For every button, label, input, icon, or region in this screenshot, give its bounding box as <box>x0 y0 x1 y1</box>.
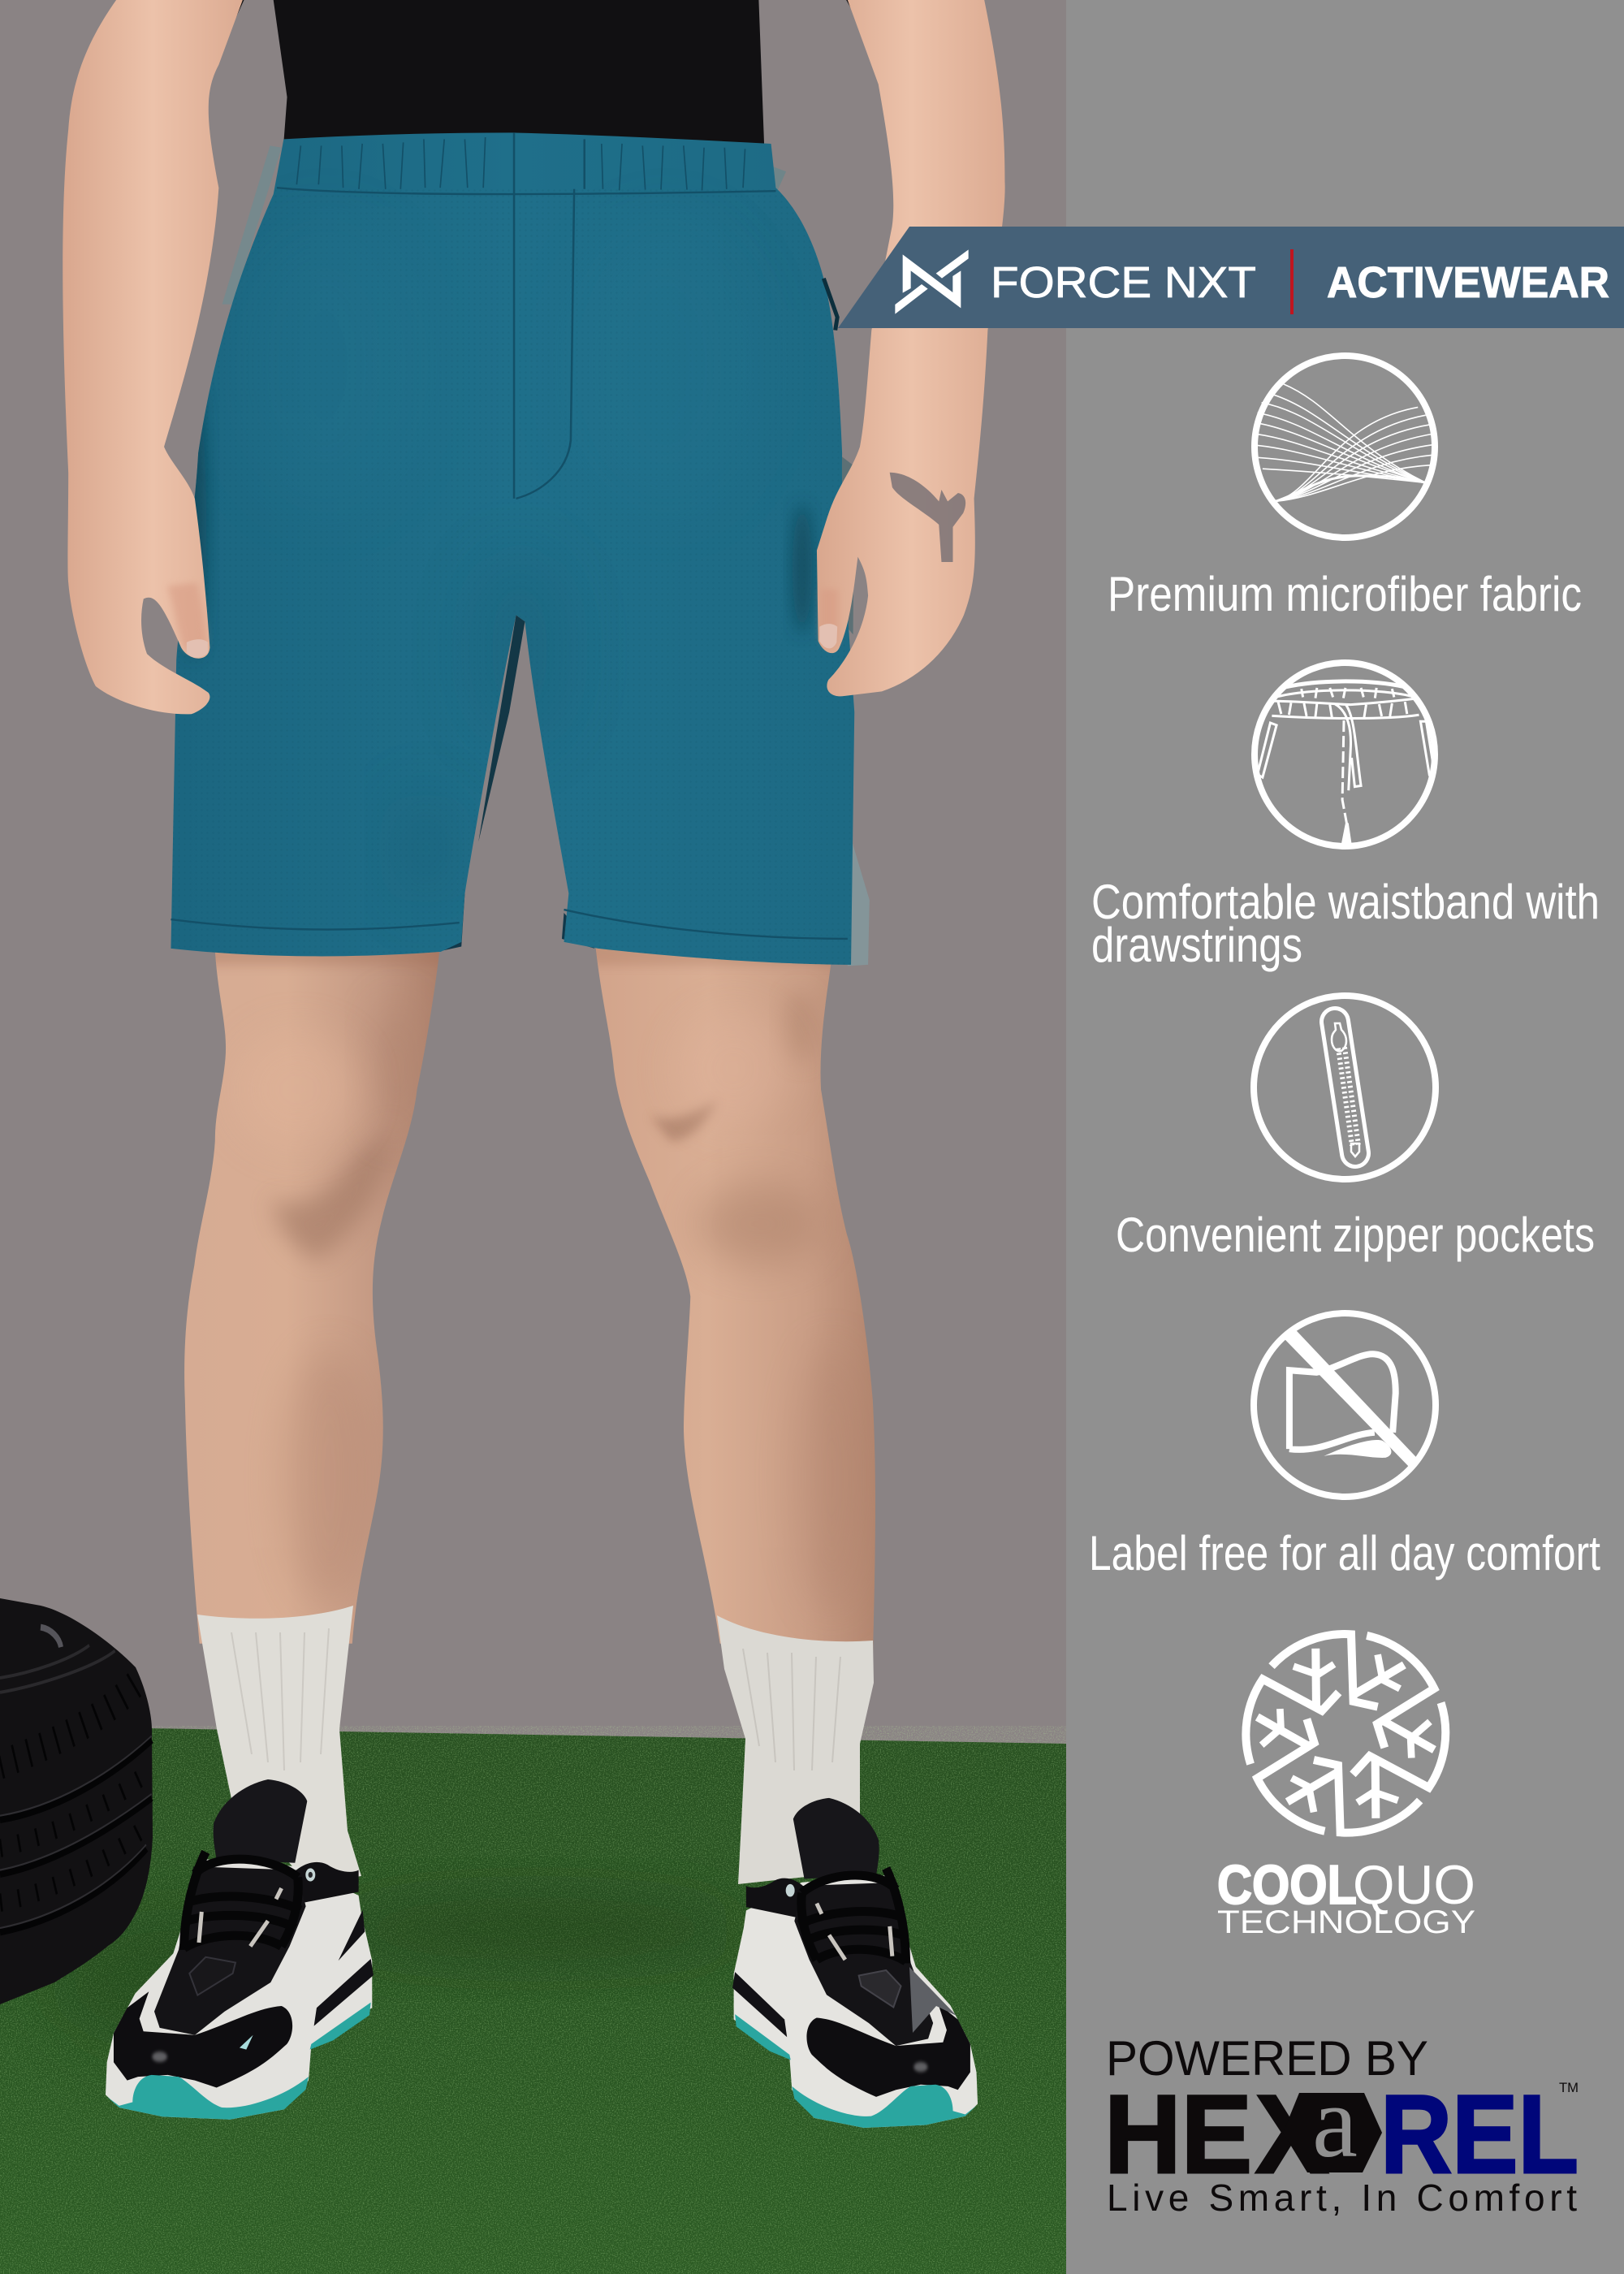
tongue <box>214 1779 307 1863</box>
feature: microfiber fabric <box>1108 356 1582 621</box>
Coolquo wordmark <box>1217 1854 1475 1940</box>
laces <box>184 1852 300 1950</box>
collar <box>292 1862 359 1903</box>
waistband, fly and hem stitching <box>171 132 848 939</box>
icon: Force NXT logo <box>895 249 969 314</box>
icon: crossed-out label <box>1254 1313 1436 1497</box>
banner: Force NXT Activewear <box>838 227 1624 328</box>
left sock <box>197 1606 361 1884</box>
Coolquo wordmark: TECHNOLOGY <box>1217 1904 1475 1940</box>
tagline: Live Smart, In Comfort <box>1107 2177 1577 2219</box>
category name: ACTIVEWEAR <box>1327 258 1609 307</box>
black shirt <box>218 0 868 145</box>
brand name: FORCE NXT <box>991 258 1256 307</box>
photo: model in teal shorts <box>0 0 1066 2274</box>
right arm and hand <box>817 0 1005 696</box>
feature: label free <box>1089 1313 1600 1580</box>
right sock <box>717 1615 875 1884</box>
Hexarel wordmark <box>1104 2066 1579 2197</box>
artificial grass floor <box>0 1726 1066 2274</box>
icon: snowflake <box>1223 1619 1469 1848</box>
powered by: POWERED BY <box>1106 2031 1428 2086</box>
toe cap <box>114 1991 292 2087</box>
Coolquo wordmark: QUO <box>1353 1854 1475 1916</box>
tire <box>0 1598 153 2004</box>
leg right <box>588 934 875 1659</box>
mesh upper <box>154 1866 306 2035</box>
Hexarel wordmark: a <box>1312 2066 1358 2179</box>
Coolquo wordmark: COOL <box>1217 1854 1357 1916</box>
feature: zipper pockets <box>1116 996 1595 1262</box>
icon: zipper <box>1254 996 1436 1179</box>
Hexarel wordmark: X <box>1255 2073 1328 2197</box>
feature: waistband with drawstrings: drawstrings <box>1091 918 1302 972</box>
divider <box>1290 249 1294 314</box>
Hexarel wordmark: REL <box>1380 2073 1579 2197</box>
left shoe <box>106 1779 374 2120</box>
panel: grey feature column <box>1066 0 1624 2274</box>
Hexarel wordmark: HE <box>1104 2073 1252 2197</box>
icon: fabric fibers <box>1255 356 1435 538</box>
left arm and hand <box>63 0 243 714</box>
wall background <box>0 0 1066 1754</box>
Hexarel wordmark: TM <box>1559 2080 1579 2095</box>
tattoo: bird on hand <box>890 473 965 562</box>
shorts <box>162 132 893 966</box>
leg left <box>184 934 448 1644</box>
right shoe <box>732 1798 978 2128</box>
teal sole <box>107 2003 371 2120</box>
icon: waistband <box>1255 663 1435 846</box>
feature: waistband with drawstrings <box>1091 663 1600 972</box>
grey side panels <box>222 145 282 305</box>
logo: powered by Hexarel <box>1104 2031 1579 2219</box>
feature: Coolquo technology <box>1217 1619 1475 1940</box>
side stripes <box>314 1910 374 2026</box>
shorts shading and mesh texture <box>179 400 822 919</box>
back of shorts hem <box>438 893 594 952</box>
